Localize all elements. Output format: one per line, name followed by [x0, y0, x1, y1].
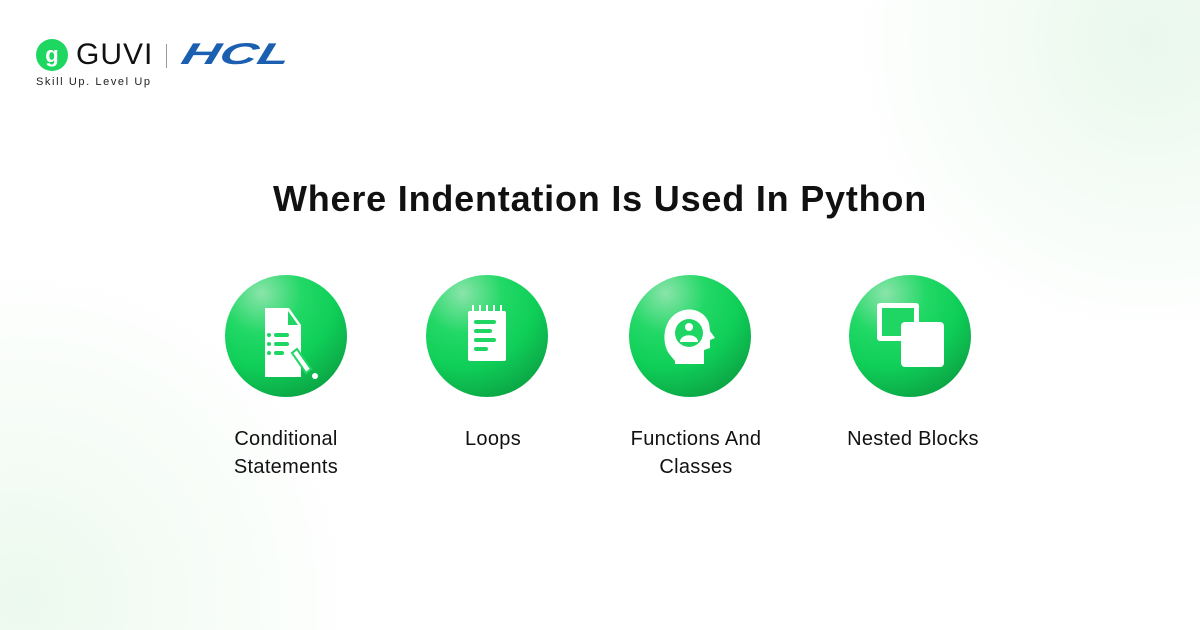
label: loops: Loops [465, 428, 521, 450]
label: functions and classes: Functions And [631, 428, 761, 450]
logo: HCL [178, 38, 294, 71]
icon: guvi [36, 39, 68, 71]
label: functions and classes [631, 428, 761, 478]
label: conditional statements: Conditional [234, 428, 338, 450]
icon: guvi: g [45, 42, 59, 67]
icon: conditional statements [225, 275, 347, 397]
logo [36, 38, 294, 88]
label: functions and classes: Classes [659, 456, 733, 478]
icon: loops [426, 275, 548, 397]
icon: functions and classes [629, 275, 751, 397]
logo: Skill Up. Level Up [36, 76, 152, 88]
label: conditional statements: Statements [234, 456, 338, 478]
logo: GUVI [76, 38, 153, 71]
label: nested blocks: Nested Blocks [847, 428, 979, 450]
icon: nested blocks [849, 275, 971, 397]
title: Where Indentation Is Used In Python [273, 178, 927, 219]
label: conditional statements [234, 428, 338, 478]
